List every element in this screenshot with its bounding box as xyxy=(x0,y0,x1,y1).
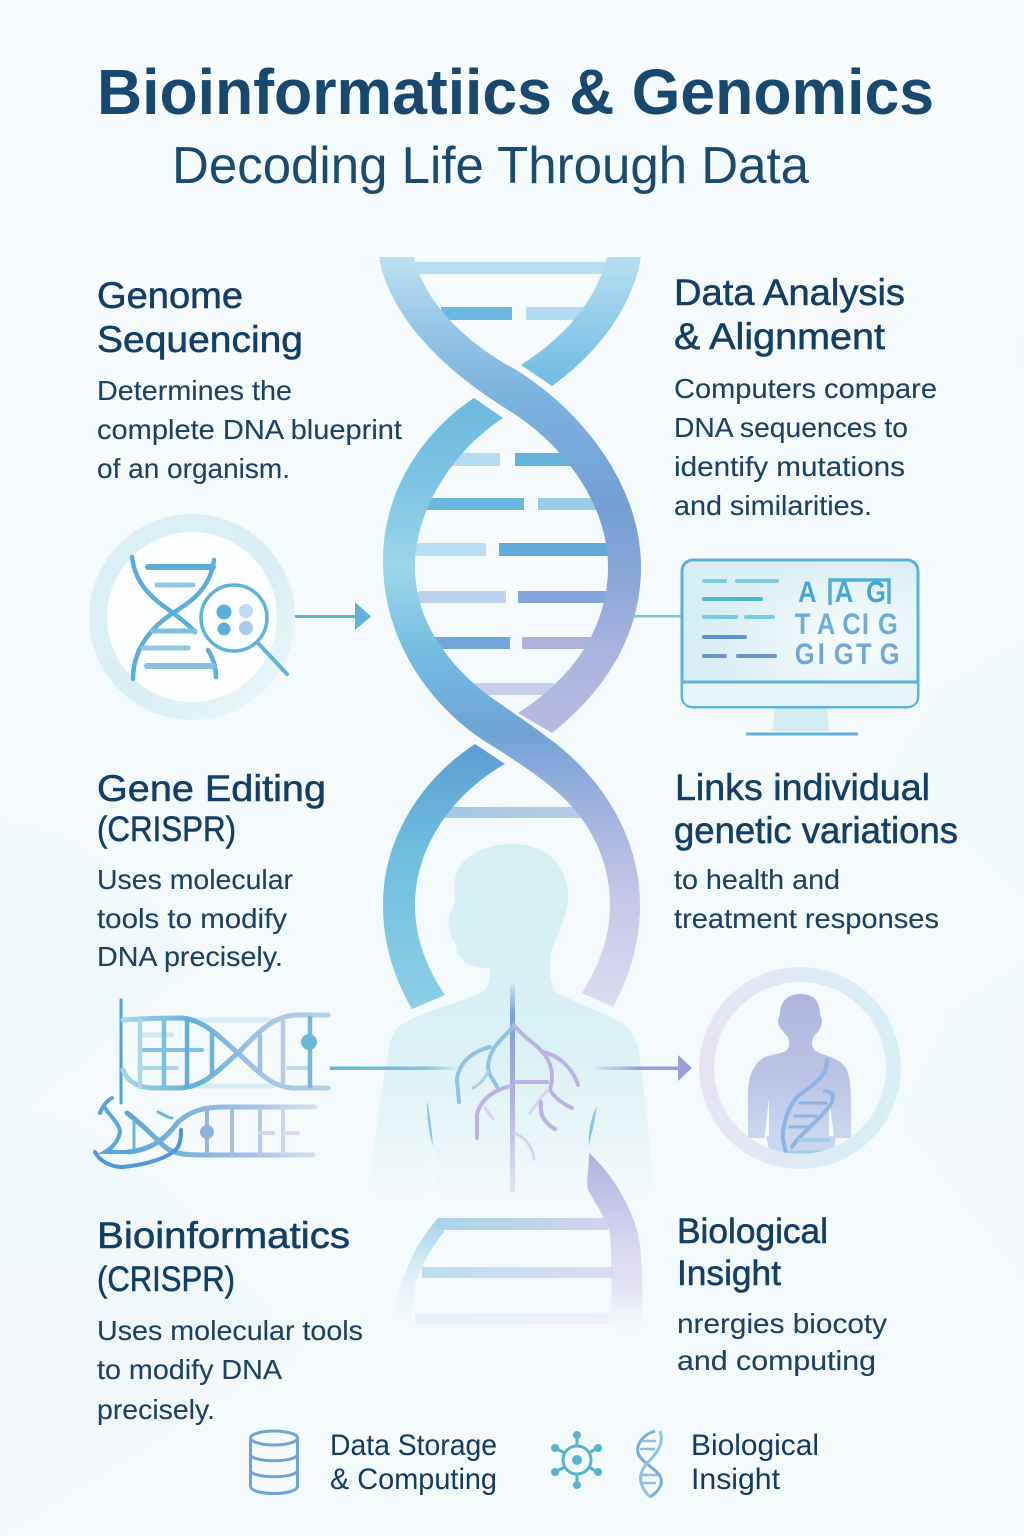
description xyxy=(677,1308,887,1376)
description xyxy=(97,375,402,484)
heading xyxy=(674,767,958,851)
icon: monitor: AAG xyxy=(798,575,886,608)
label: Insight xyxy=(691,1463,781,1496)
heading xyxy=(97,768,326,849)
central DNA helix xyxy=(379,257,641,1009)
heading: Gene Editing xyxy=(97,768,326,809)
description: DNA sequences to xyxy=(674,412,908,443)
icon: DNA with magnifier xyxy=(98,523,287,711)
heading: Sequencing xyxy=(97,319,303,360)
icon: cut strand xyxy=(95,1098,315,1167)
panel: gene editing xyxy=(95,768,328,1167)
icon: magnifier xyxy=(201,585,287,674)
description: and computing xyxy=(677,1345,876,1376)
heading: Biological xyxy=(677,1212,828,1251)
heading: Data Analysis xyxy=(674,272,905,313)
heading: Genome xyxy=(97,275,243,316)
human silhouette xyxy=(368,844,655,1225)
description: tools to modify xyxy=(97,903,287,934)
description: nrergies biocoty xyxy=(677,1308,887,1339)
title: Bioinformatiics & Genomics xyxy=(97,56,934,128)
label xyxy=(330,1429,497,1496)
description: complete DNA blueprint xyxy=(97,414,402,445)
heading: Insight xyxy=(677,1254,781,1293)
heading: (CRISPR) xyxy=(97,810,236,849)
label: & Computing xyxy=(330,1463,497,1496)
description: Computers compare xyxy=(674,373,937,404)
description: DNA precisely. xyxy=(97,941,283,972)
description: Uses molecular tools xyxy=(97,1315,363,1346)
icon: monitor xyxy=(682,560,918,734)
description: to modify DNA xyxy=(97,1354,282,1385)
panel: personalized medicine xyxy=(674,767,958,1162)
description: to health and xyxy=(674,864,840,895)
icon: monitor: GIGTG xyxy=(795,637,900,670)
description: of an organism. xyxy=(97,453,290,484)
heading: Bioinformatics xyxy=(97,1215,350,1256)
label: Data Storage xyxy=(330,1429,497,1462)
connector: editing to body xyxy=(330,1066,458,1070)
description: treatment responses xyxy=(674,903,939,934)
footer: data storage xyxy=(250,1429,497,1496)
icon: CRISPR DNA editing xyxy=(95,1000,328,1167)
description: Uses molecular xyxy=(97,864,293,895)
label: Biological xyxy=(691,1429,819,1462)
description: precisely. xyxy=(97,1394,215,1425)
subtitle: Decoding Life Through Data xyxy=(172,137,809,195)
footer: biological insight xyxy=(552,1429,819,1497)
label xyxy=(691,1429,819,1496)
icon: small DNA xyxy=(638,1431,661,1497)
description xyxy=(674,373,937,521)
vascular tree xyxy=(457,983,578,1192)
icon: monitor: TACIG xyxy=(795,607,898,640)
heading xyxy=(97,275,303,360)
arrow: sequencing to helix xyxy=(295,602,371,630)
description xyxy=(674,864,939,934)
panel: genome sequencing xyxy=(97,275,402,711)
connector: helix to monitor xyxy=(634,615,682,618)
panel: data analysis xyxy=(674,272,937,734)
heading: & Alignment xyxy=(674,316,886,357)
icon: person with DNA in ring xyxy=(706,974,894,1162)
heading xyxy=(677,1212,828,1293)
description xyxy=(97,864,293,972)
description xyxy=(97,1315,363,1425)
panel: bioinformatics xyxy=(97,1215,363,1425)
heading xyxy=(674,272,905,357)
heading xyxy=(97,1215,350,1299)
heading: (CRISPR) xyxy=(97,1260,235,1299)
description: Determines the xyxy=(97,375,292,406)
heading: genetic variations xyxy=(674,810,958,851)
arrow: body to medicine xyxy=(594,1055,692,1081)
heading: Links individual xyxy=(675,767,930,808)
lower faded DNA xyxy=(392,1153,642,1340)
description: and similarities. xyxy=(674,490,872,521)
icon: database xyxy=(250,1431,298,1494)
description: identify mutations xyxy=(674,451,905,482)
icon: network node xyxy=(552,1432,602,1488)
panel: biological insight xyxy=(677,1212,887,1376)
